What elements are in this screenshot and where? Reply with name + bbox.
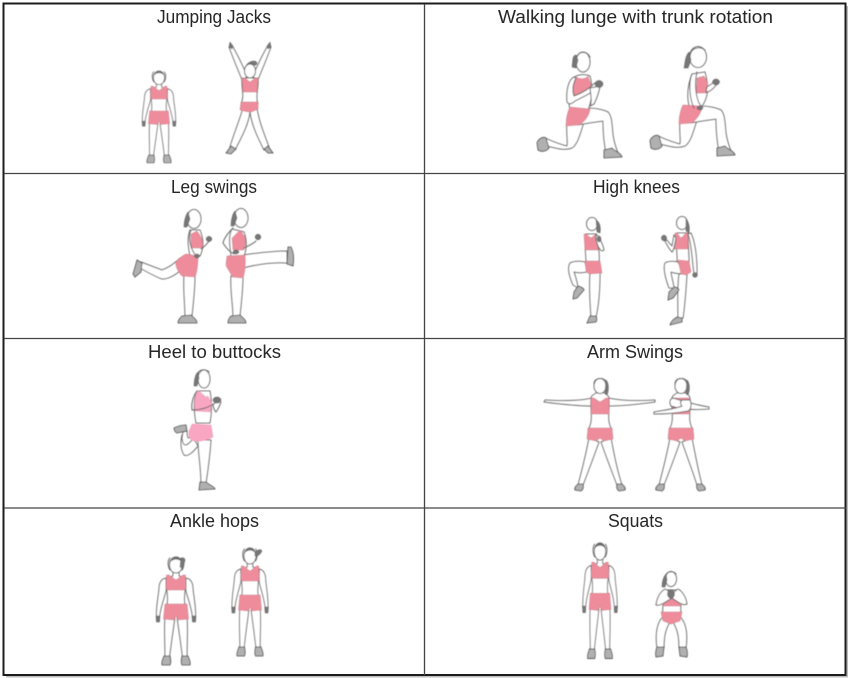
panel: jumping jacks	[142, 7, 273, 163]
figure: arms open	[544, 378, 655, 491]
heading: leg swings: Leg swings	[171, 177, 257, 197]
heading: squats: Squats	[608, 511, 663, 531]
figure: standing pose	[142, 71, 176, 163]
panel: high knees	[569, 177, 697, 325]
panel: arm swings	[544, 342, 709, 491]
figure: leg swung back	[133, 210, 212, 323]
figure: heel raised to buttocks	[174, 370, 221, 490]
heading: heel to buttocks: Heel to buttocks	[148, 342, 281, 362]
figure: standing upright	[582, 543, 618, 659]
figure: lunge with trunk rotated	[650, 46, 735, 156]
panel: squats	[582, 511, 687, 659]
figure: jump with arms up	[226, 42, 273, 154]
figure: right knee raised	[661, 216, 697, 325]
figure: lunge with arms forward	[537, 52, 622, 158]
figure: standing on the ground	[156, 557, 196, 665]
figure: hopping	[232, 548, 268, 656]
heading: high knees: High knees	[593, 177, 680, 197]
heading: arm swings: Arm Swings	[587, 342, 683, 362]
figure: squatting with hands clasped	[656, 572, 687, 657]
panel: leg swings	[133, 177, 294, 323]
heading: jumping jacks: Jumping Jacks	[157, 7, 271, 27]
panel: ankle hops	[156, 511, 268, 665]
heading: walking lunge: Walking lunge with trunk rotation	[498, 7, 773, 27]
heading: ankle hops: Ankle hops	[170, 511, 259, 531]
figure: arms crossed	[654, 378, 709, 491]
figure: leg swung forward	[223, 208, 294, 323]
panel: heel to buttocks	[148, 342, 281, 490]
panel: walking lunge	[498, 7, 773, 158]
figure: left knee raised	[569, 218, 604, 323]
